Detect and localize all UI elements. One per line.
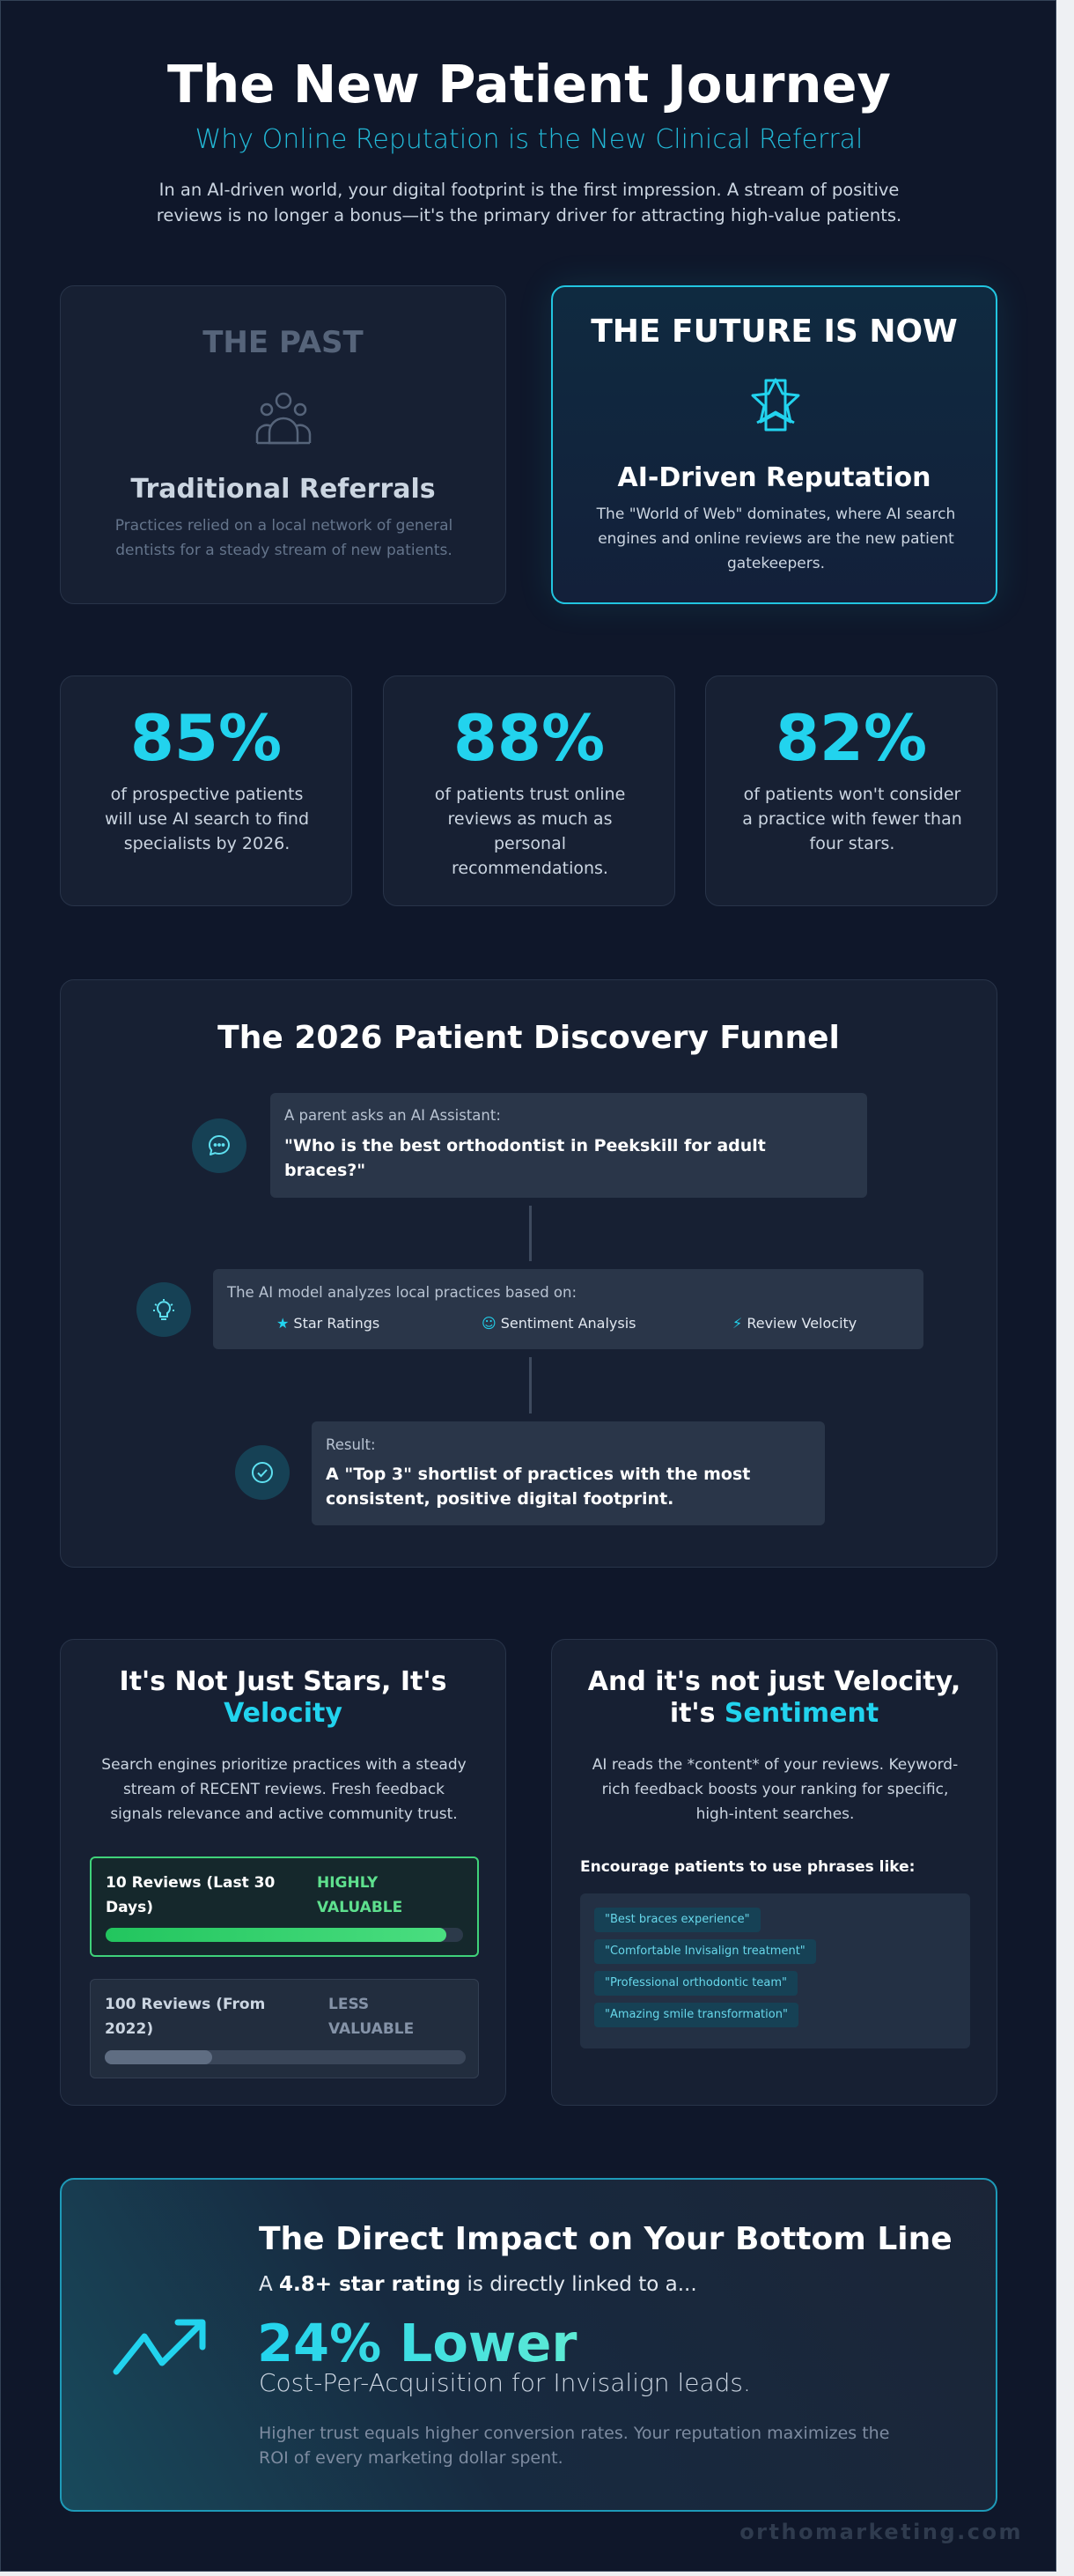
funnel heading: The 2026 Patient Discovery Funnel (217, 1020, 840, 1056)
sentiment heading: And it's not just Velocity, (588, 1666, 960, 1697)
heading: ai-driven reputation: AI-Driven Reputation (618, 462, 931, 493)
panel: sentiment (551, 1639, 997, 2106)
step 3 box (312, 1421, 825, 1525)
bar: recent reviews (90, 1856, 479, 1957)
panel: the future (551, 285, 997, 604)
stat: 82% (705, 675, 997, 906)
footer brand: orthomarketing.com (739, 2520, 1023, 2544)
title: The New Patient Journey (167, 54, 891, 114)
sentiment heading (588, 1666, 960, 1729)
step 2 box (213, 1269, 923, 1349)
step 2 box: The AI model analyzes local practices based on: (227, 1284, 577, 1301)
text: past description: Practices relied on a local network of general dentists for a steady stream of new patients. (115, 517, 452, 559)
text: future description: The "World of Web" dominates, where AI search engines and online reviews are the new patient gatekeepers. (597, 506, 955, 572)
sentiment text: AI reads the *content* of your reviews. Keyword- (592, 1756, 958, 1774)
heading: bottom line: The Direct Impact on Your Bottom Line (259, 2221, 953, 2257)
step 1 box (270, 1093, 867, 1198)
bar: older reviews: VALUABLE (328, 2020, 414, 2038)
sentiment heading: it's Sentiment (670, 1698, 879, 1729)
icon: check (235, 1445, 290, 1500)
bar: recent reviews: 10 Reviews (Last 30 Days) (106, 1874, 275, 1916)
stat: 88%: 88% (453, 701, 605, 775)
panel: bottom line (60, 2178, 997, 2512)
bar: older reviews: 100 Reviews (From 2022) (105, 1996, 265, 2038)
stat: 85% (60, 675, 352, 906)
sentiment text: high-intent searches. (696, 1805, 854, 1823)
icon: star badge (751, 378, 799, 432)
stat: 88%: of patients trust online reviews as much as personal recommendations. (435, 785, 625, 878)
velocity heading (120, 1666, 446, 1729)
criteria list: ★ Star Ratings (276, 1315, 379, 1332)
text: star rating link: A 4.8+ star rating is directly linked to a... (259, 2273, 697, 2296)
stat: 82%: 82% (776, 701, 927, 775)
panel: discovery funnel (60, 979, 997, 1568)
bar: older reviews (90, 1979, 479, 2078)
bar: recent reviews: HIGHLY (317, 1874, 378, 1892)
icon: bulb (136, 1282, 191, 1337)
step 3 box: A "Top 3" shortlist of practices with the most consistent, positive digital footprint. (326, 1465, 750, 1509)
phrases box: "Professional orthodontic team" (605, 1976, 787, 1989)
big stat: 24% Lower (257, 2313, 577, 2373)
step 1 box: A parent asks an AI Assistant: (284, 1107, 501, 1124)
bar: recent reviews: VALUABLE (317, 1899, 402, 1916)
sentiment text: rich feedback boosts your ranking for specific, (602, 1781, 948, 1798)
phrases box: "Comfortable Invisalign treatment" (605, 1945, 806, 1958)
velocity text: Search engines prioritize practices with a steady stream of RECENT reviews. Fresh feedback signals relevance and active community trust. (101, 1756, 467, 1823)
phrases label: Encourage patients to use phrases like: (580, 1858, 915, 1876)
bar: older reviews: LESS (328, 1996, 369, 2013)
icon: chat (192, 1118, 246, 1173)
criteria list: ☺ Sentiment Analysis (482, 1315, 636, 1332)
subtitle: Why Online Reputation is the New Clinical Referral (195, 124, 863, 155)
heading: future is now: THE FUTURE IS NOW (591, 314, 958, 350)
stat: 85%: 85% (130, 701, 282, 775)
panel: the past (60, 285, 506, 604)
step 3 box: Result: (326, 1436, 376, 1453)
stat: 88% (383, 675, 675, 906)
stat: 85%: of prospective patients will use AI search to find specialists by 2026. (105, 785, 309, 853)
phrases box (580, 1893, 970, 2048)
criteria list: ⚡ Review Velocity (732, 1315, 857, 1332)
connector (529, 1357, 532, 1413)
velocity heading: Velocity (224, 1698, 342, 1729)
connector (529, 1206, 532, 1261)
panel: velocity (60, 1639, 506, 2106)
velocity heading: It's Not Just Stars, It's (120, 1666, 446, 1697)
heading: the past: THE PAST (202, 325, 364, 360)
heading: traditional referrals: Traditional Referrals (130, 474, 436, 505)
phrases box: "Best braces experience" (605, 1913, 750, 1926)
text: cpa: Cost-Per-Acquisition for Invisalign leads. (259, 2368, 751, 2397)
stat: 82%: of patients won't consider a practice with fewer than four stars. (742, 785, 962, 853)
phrases box: "Amazing smile transformation" (605, 2008, 788, 2021)
criteria list (276, 1315, 857, 1332)
icon: trend arrow (113, 2320, 206, 2374)
sentiment text (592, 1756, 958, 1823)
text: roi: Higher trust equals higher conversion rates. Your reputation maximizes the ROI of every marketing dollar spent. (259, 2424, 889, 2468)
intro text: In an AI-driven world, your digital footprint is the first impression. A stream of positive reviews is no longer a bonus—it's the primary driver for attracting high-value patients. (157, 180, 901, 225)
step 1 box: "Who is the best orthodontist in Peekskill for adult braces?" (284, 1136, 766, 1180)
icon: people (255, 393, 312, 444)
